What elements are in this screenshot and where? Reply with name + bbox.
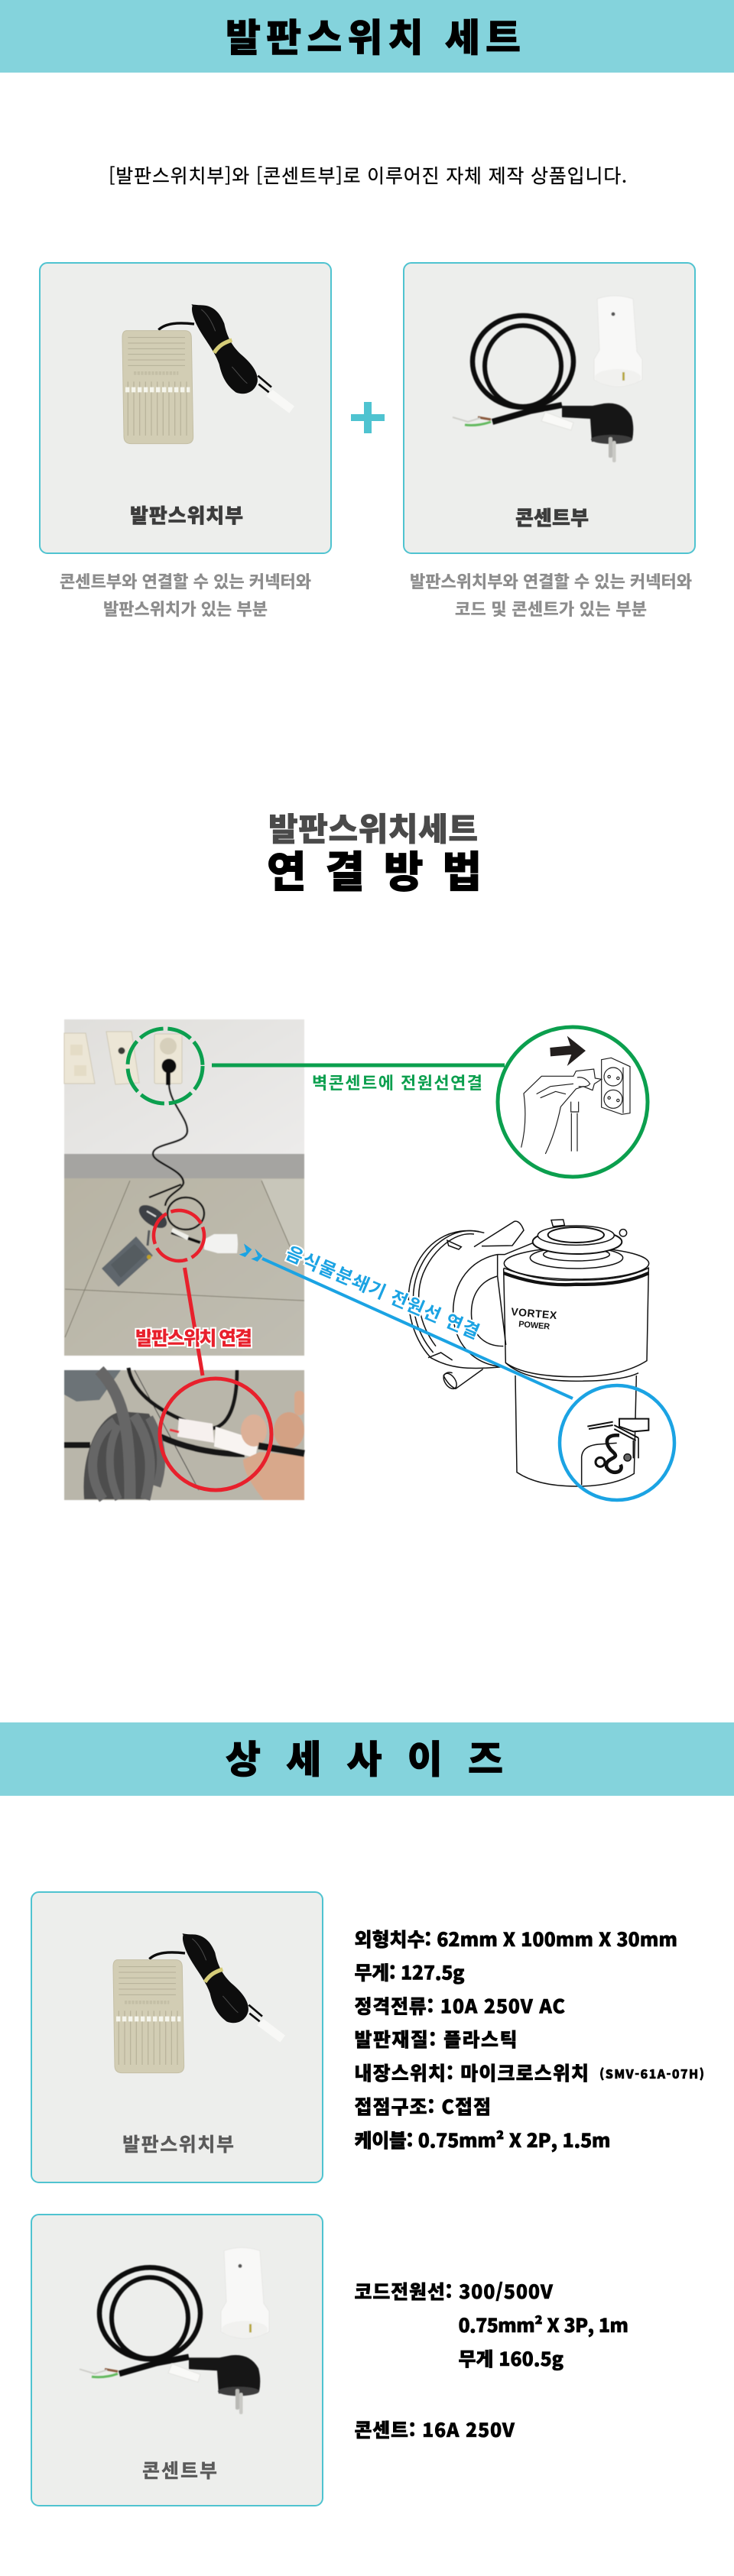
caption: foot switch part: 콘센트부와 연결할 수 있는 커넥터와 — [60, 569, 311, 593]
spec list: foot switch: 외형치수: 62mm X 100mm X 30mm — [355, 1925, 677, 1952]
photo: connector close-up — [64, 1368, 304, 1500]
caption: foot switch part: 발판스위치가 있는 부분 — [103, 596, 268, 621]
callout: foot switch connection — [135, 1204, 271, 1490]
green label: 벽콘센트에 전원선연결 — [312, 1070, 482, 1094]
dashed red circle — [147, 1204, 211, 1268]
spec list: foot switch — [355, 1925, 704, 2153]
spec list: foot switch: 무게: 127.5g — [355, 1958, 465, 1985]
heading: connection method: 발판스위치세트 — [268, 804, 478, 851]
spec list: outlet: 코드전원선: 300/500V — [355, 2277, 554, 2305]
grey cable coil — [83, 1370, 161, 1499]
plus icon — [351, 402, 385, 433]
spec list: foot switch: (SMV-61A-07H) — [599, 2064, 704, 2082]
panel: outlet detail — [31, 2215, 323, 2506]
callout: disposer power connection — [239, 1238, 674, 1500]
red circle — [160, 1379, 271, 1490]
red label: 발판스위치 연결 — [135, 1324, 252, 1351]
cable and plug detail — [587, 1419, 648, 1473]
panel: foot switch part — [40, 263, 331, 553]
brand: VORTEX POWER — [511, 1305, 558, 1332]
illustration: food waste disposer — [408, 1220, 649, 1486]
main body — [498, 1243, 649, 1381]
panel: foot switch detail — [31, 1892, 323, 2182]
title: 상 세 사 이 즈 — [226, 1729, 503, 1784]
green leader line — [212, 1064, 505, 1067]
header banner: detail size — [0, 1722, 734, 1796]
spec list: outlet — [355, 2277, 628, 2443]
spec list: foot switch: 정격전류: 10A 250V AC — [355, 1991, 565, 2019]
caption: foot switch part — [60, 569, 311, 621]
spec list: outlet: 무게 160.5g — [459, 2344, 563, 2372]
photo: cord and socket — [80, 2247, 269, 2414]
illustration: plug into wall — [521, 1036, 630, 1154]
blue circle — [560, 1385, 674, 1500]
photo: cord and socket — [453, 296, 642, 462]
spec list: foot switch: 내장스위치: 마이크로스위치 — [355, 2059, 589, 2086]
chevrons — [239, 1243, 262, 1262]
spec list: foot switch: 케이블: 0.75mm² X 2P, 1.5m — [355, 2126, 610, 2153]
callout: wall outlet connection — [128, 1027, 648, 1177]
spec list: foot switch: 접점구조: C접점 — [355, 2092, 491, 2120]
header banner: 발판스위치 세트 — [0, 0, 734, 73]
label: 발판스위치부: 발판스위치부 — [130, 501, 243, 529]
caption: outlet part: 코드 및 콘센트가 있는 부분 — [455, 596, 647, 621]
brand: VORTEX POWER: POWER — [518, 1320, 550, 1332]
dashed green circle — [128, 1029, 203, 1103]
spec list: outlet: 0.75mm² X 3P, 1m — [459, 2311, 628, 2338]
caption: outlet part — [410, 569, 692, 621]
motor housing — [408, 1221, 524, 1391]
label: 콘센트부: 콘센트부 — [515, 503, 589, 531]
top flange — [533, 1220, 627, 1254]
photo: foot switch — [122, 304, 294, 444]
fingers — [241, 1391, 304, 1500]
title: 발판스위치 세트 — [226, 8, 521, 63]
wall plates — [64, 1032, 182, 1084]
grey foot pedal — [102, 1230, 153, 1287]
panel: outlet part — [404, 263, 695, 553]
lower cylinder — [515, 1375, 636, 1486]
heading: connection method — [267, 804, 482, 900]
photo: wall outlet and floor — [64, 1019, 304, 1356]
white connector and socket — [171, 1228, 238, 1253]
spec list: foot switch: 발판재질: 플라스틱 — [355, 2025, 517, 2053]
label: 발판스위치부 — [122, 2130, 234, 2157]
spec list: outlet: 콘센트: 16A 250V — [355, 2416, 515, 2443]
white connectors — [170, 1418, 258, 1458]
caption: outlet part: 발판스위치부와 연결할 수 있는 커넥터와 — [410, 569, 692, 593]
heading: connection method: 연 결 방 법 — [267, 838, 482, 900]
intro text: [발판스위치부]와 [콘센트부]로 이루어진 자체 제작 상품입니다. — [109, 161, 627, 189]
photo: foot switch — [113, 1933, 285, 2073]
brand: VORTEX POWER: VORTEX — [511, 1305, 558, 1321]
black cable with plug — [135, 1059, 204, 1233]
red leader line — [185, 1268, 203, 1375]
blue leader line — [262, 1259, 573, 1398]
green circle — [498, 1027, 648, 1177]
blue label: 음식물분쇄기 전원선 연결 — [282, 1238, 484, 1344]
label: 콘센트부 — [142, 2456, 217, 2484]
